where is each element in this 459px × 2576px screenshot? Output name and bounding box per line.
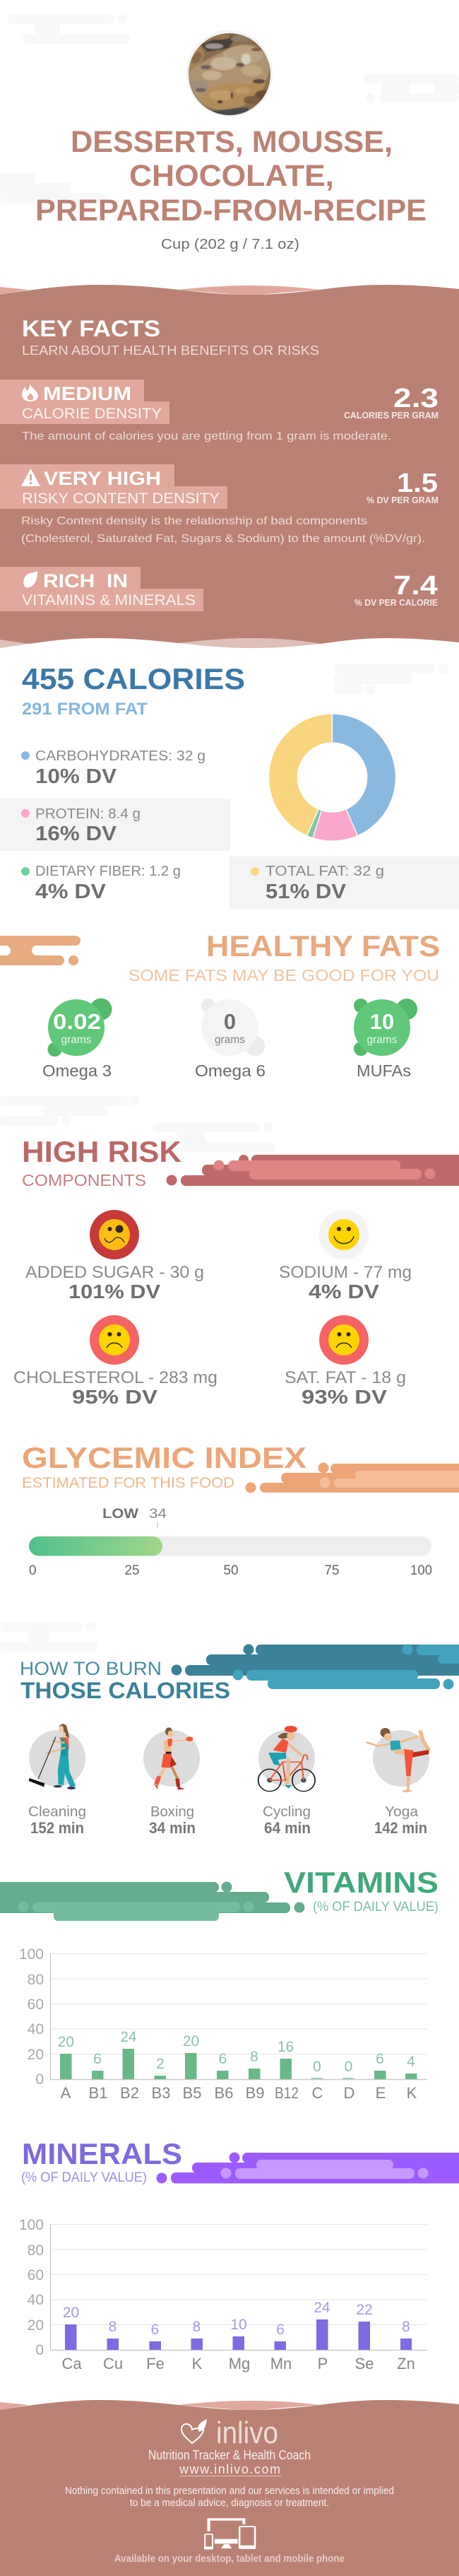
logo: inlivo heart and leaf [181,2419,207,2443]
panel: healthy fats [0,929,440,1080]
glycemic scale ticks: 50 [223,1563,239,1578]
icon: leaf [23,571,37,588]
bar chart: minerals: 6 [151,2322,159,2338]
title [35,125,427,228]
fact: rich in vitamins and minerals: VITAMINS & MINERALS [22,592,196,608]
badge: MUFAs: grams [366,1034,398,1046]
bar chart: vitamins: C [312,2084,323,2102]
legend: carbohydrates: 10% DV [35,765,117,788]
activity: cycling: Cycling [263,1804,311,1820]
fact: rich in vitamins and minerals: RICH IN [43,570,128,592]
bar chart: minerals: Mn [270,2355,292,2372]
activity: boxing [143,1727,200,1837]
calories heading: 455 CALORIES [22,662,245,695]
bar chart: minerals: K [192,2355,203,2372]
activity: cleaning: 152 min [30,1819,84,1837]
bar chart: minerals: 20 [28,2317,44,2334]
logo wordmark: inlivo [216,2416,278,2450]
title: CHOCOLATE, [129,159,334,193]
badge: MUFAs: 10 [370,1009,394,1034]
glycemic scale ticks: 100 [410,1563,432,1578]
fact: risky content density: (Cholesterol, Saturated Fat, Sugars & Sodium) to the amount (%DV/gr). [21,533,425,545]
bar chart: minerals: 24 [314,2300,330,2316]
risk: sodium: SODIUM - 77 mg [279,1263,412,1282]
glycemic scale bar [29,1536,431,1556]
risk: added sugar [25,1210,204,1302]
legend: dietary fiber [21,864,181,903]
fact: calorie density: The amount of calories you are getting from 1 gram is moderate. [22,430,391,442]
minerals heading: MINERALS [22,2137,182,2170]
risk: cholesterol: CHOLESTEROL - 283 mg [13,1368,217,1387]
glycemic scale ticks: 75 [324,1563,340,1578]
risk: added sugar: 101% DV [68,1281,160,1302]
bar chart: vitamins: B6 [215,2084,233,2102]
activity: cycling: 64 min [264,1819,311,1837]
bar chart: minerals: 6 [276,2322,285,2338]
fact: rich in vitamins and minerals: 7.4 [393,571,438,601]
badge: MUFAs [354,999,417,1080]
bar chart: vitamins: 8 [250,2049,258,2065]
fact: rich in vitamins and minerals [0,567,438,611]
decoration: healthy fats ribbon [0,936,81,965]
risk: sodium [279,1210,412,1302]
serving size: Cup (202 g / 7.1 oz) [161,237,299,252]
title: PREPARED-FROM-RECIPE [35,194,427,228]
bar chart: vitamins: 60 [28,1996,44,2013]
badge: MUFAs: MUFAs [357,1061,411,1080]
bar chart: minerals: 0 [35,2342,44,2358]
decoration: vitamins ribbon [0,1881,305,1921]
disclaimer: Nothing contained in this presentation and our services is intended or implied [65,2485,394,2497]
panel: calories [0,662,459,909]
tagline: Nutrition Tracker & Health Coach [148,2448,311,2462]
bar chart: vitamins: 20 [28,2047,44,2063]
disclaimer: to be a medical advice, diagnosis or treatment. [130,2497,329,2509]
legend: total fat: 51% DV [266,881,347,903]
bar chart: vitamins: B3 [152,2084,170,2102]
risk: added sugar: ADDED SUGAR - 30 g [25,1263,204,1282]
bar chart: vitamins: K [407,2084,417,2102]
high risk subheading: COMPONENTS [22,1171,146,1189]
panel: glycemic index [22,1441,459,1578]
availability note: Available on your desktop, tablet and mobile phone [114,2553,345,2565]
badge: omega 3: 0.02 [53,1009,101,1034]
activity: cycling [258,1726,315,1837]
burn heading line 2: THOSE CALORIES [20,1678,230,1703]
minerals subheading: (% OF DAILY VALUE) [21,2170,147,2185]
activity: boxing: Boxing [150,1804,194,1820]
bar chart: vitamins: 80 [28,1972,44,1988]
badge: omega 3: Omega 3 [42,1061,112,1080]
activity: cleaning: Cleaning [28,1804,86,1820]
bar chart: vitamins: A [61,2084,71,2102]
bar chart: minerals: 8 [402,2319,410,2335]
decoration: high risk ribbon [167,1155,459,1186]
decoration: glycemic ribbon [246,1463,459,1493]
fact: calorie density: MEDIUM [43,383,131,404]
risk: sodium: 4% DV [309,1281,379,1302]
bar chart: vitamins: 100 [19,1946,44,1963]
risk: saturated fat: 93% DV [302,1386,387,1408]
fact: risky content density: VERY HIGH [44,468,161,489]
bar chart: minerals: 22 [356,2302,373,2318]
bar chart: vitamins: 0 [345,2059,352,2075]
legend: dietary fiber: DIETARY FIBER: 1.2 g [35,864,181,879]
activity: yoga: 142 min [374,1819,427,1837]
fact: calorie density: CALORIES PER GRAM [344,411,439,420]
bar chart: vitamins: B1 [89,2084,107,2102]
vitamins subheading: (% OF DAILY VALUE) [313,1900,439,1915]
fact: rich in vitamins and minerals: % DV PER CALORIE [354,598,438,608]
faint background decorations [0,14,459,1652]
bar chart: minerals [19,2217,427,2372]
bar chart: minerals: Fe [146,2355,165,2372]
risk: cholesterol: 95% DV [72,1386,157,1408]
glycemic level label: LOW [102,1507,138,1522]
badge: omega 3 [42,998,112,1080]
bar chart: minerals: 100 [19,2217,44,2233]
bar chart: minerals: Se [355,2355,374,2372]
fact: calorie density: CALORIE DENSITY [22,406,162,422]
key facts subheading: LEARN ABOUT HEALTH BENEFITS OR RISKS [22,343,319,358]
bar chart: vitamins: D [344,2084,354,2102]
glycemic level label: 34 [149,1507,167,1522]
glycemic heading: GLYCEMIC INDEX [22,1441,306,1474]
bar chart: vitamins: 6 [376,2051,384,2067]
vitamins heading: VITAMINS [284,1866,439,1899]
badge: omega 6: Omega 6 [195,1061,266,1080]
legend: protein [0,799,230,851]
key facts heading: KEY FACTS [22,316,160,341]
bar chart: minerals: 60 [28,2267,44,2283]
healthy fats heading: HEALTHY FATS [206,929,440,963]
bar chart: vitamins: E [376,2084,386,2102]
bar chart: vitamins: B2 [120,2084,139,2102]
bar chart: minerals: 40 [28,2292,44,2308]
decoration: burn ribbon [171,1644,459,1689]
glycemic scale ticks [29,1563,432,1578]
donut chart: macronutrients [268,714,395,841]
bar chart: minerals: 8 [109,2319,117,2335]
fact: calorie density: 2.3 [393,384,439,413]
bar chart: minerals: Zn [397,2355,415,2372]
icon: devices [204,2519,256,2549]
bar chart: minerals: 10 [230,2317,247,2333]
legend: carbohydrates [21,748,205,788]
bar chart: vitamins: 2 [156,2056,165,2072]
bar chart: vitamins: 6 [219,2051,227,2067]
legend: dietary fiber: 4% DV [35,881,107,903]
risk: saturated fat [285,1315,406,1408]
disclaimer [65,2485,394,2509]
decoration: minerals ribbon [157,2153,459,2184]
healthy fats subheading: SOME FATS MAY BE GOOD FOR YOU [129,966,439,984]
bar chart: minerals: P [318,2355,328,2372]
food photo: chocolate chip cookies [186,30,273,117]
bar chart: vitamins: 16 [278,2039,294,2055]
high risk heading: HIGH RISK [22,1135,181,1168]
bar chart: vitamins: 20 [183,2033,199,2049]
bar chart: minerals: 20 [63,2305,79,2321]
badge: omega 6: 0 [224,1009,236,1034]
legend: total fat: TOTAL FAT: 32 g [266,864,384,879]
bar chart: minerals: Mg [229,2355,250,2372]
bar chart: minerals: Ca [61,2355,82,2372]
footer [0,2400,459,2576]
icon: warning triangle [21,469,40,486]
legend: protein: PROTEIN: 8.4 g [35,806,141,822]
bar chart: vitamins: 24 [120,2029,137,2045]
bar chart: vitamins: 6 [93,2051,102,2067]
fact: risky content density [0,464,439,545]
bar chart: vitamins: 0 [35,2071,44,2088]
panel: minerals [19,2137,459,2372]
bar chart: vitamins: B9 [246,2084,264,2102]
legend: total fat [230,857,459,909]
glycemic scale ticks: 0 [29,1563,37,1578]
panel: high risk components [13,1135,459,1408]
bar chart: vitamins: 0 [313,2059,321,2075]
bar chart: vitamins [19,1946,427,2102]
title: DESSERTS, MOUSSE, [71,125,393,159]
icon: flame [22,383,38,401]
panel: how to burn those calories [20,1644,459,1837]
activity: yoga [366,1728,429,1837]
bar chart: minerals: 80 [28,2242,44,2259]
fact: risky content density: % DV PER GRAM [366,495,439,505]
legend: protein: 16% DV [35,823,117,845]
fact: calorie density [0,380,439,442]
legend: carbohydrates: CARBOHYDRATES: 32 g [35,748,205,764]
risk: saturated fat: SAT. FAT - 18 g [285,1368,406,1387]
bar chart: minerals: 8 [193,2319,201,2335]
glycemic subheading: ESTIMATED FOR THIS FOOD [22,1475,234,1491]
activity: yoga: Yoga [385,1804,419,1820]
risk: cholesterol [13,1315,217,1408]
activity: boxing: 34 min [149,1819,196,1837]
badge: omega 6: grams [215,1034,245,1046]
fact: risky content density: RISKY CONTENT DENSITY [22,490,220,507]
badge: omega 6 [195,999,266,1080]
fact: risky content density: 1.5 [397,469,438,498]
bar chart: vitamins: 40 [28,2021,44,2037]
glycemic level label [102,1507,167,1529]
bar chart: vitamins: B12 [275,2084,299,2102]
glycemic scale ticks: 25 [124,1563,140,1578]
badge: omega 3: grams [61,1034,92,1046]
fact: risky content density: Risky Content density is the relationship of bad components [21,515,367,527]
calories from fat: 291 FROM FAT [22,700,148,719]
bar chart: vitamins: B5 [183,2084,201,2102]
panel: key facts [0,285,459,648]
burn heading line 1: HOW TO BURN [20,1658,162,1679]
activity: cleaning [28,1724,86,1837]
bar chart: vitamins: 4 [407,2054,415,2070]
bar chart: vitamins: 20 [58,2034,74,2050]
website link: www.inlivo.com [179,2462,280,2476]
panel: vitamins [0,1866,439,2102]
bar chart: minerals: Cu [103,2355,123,2372]
